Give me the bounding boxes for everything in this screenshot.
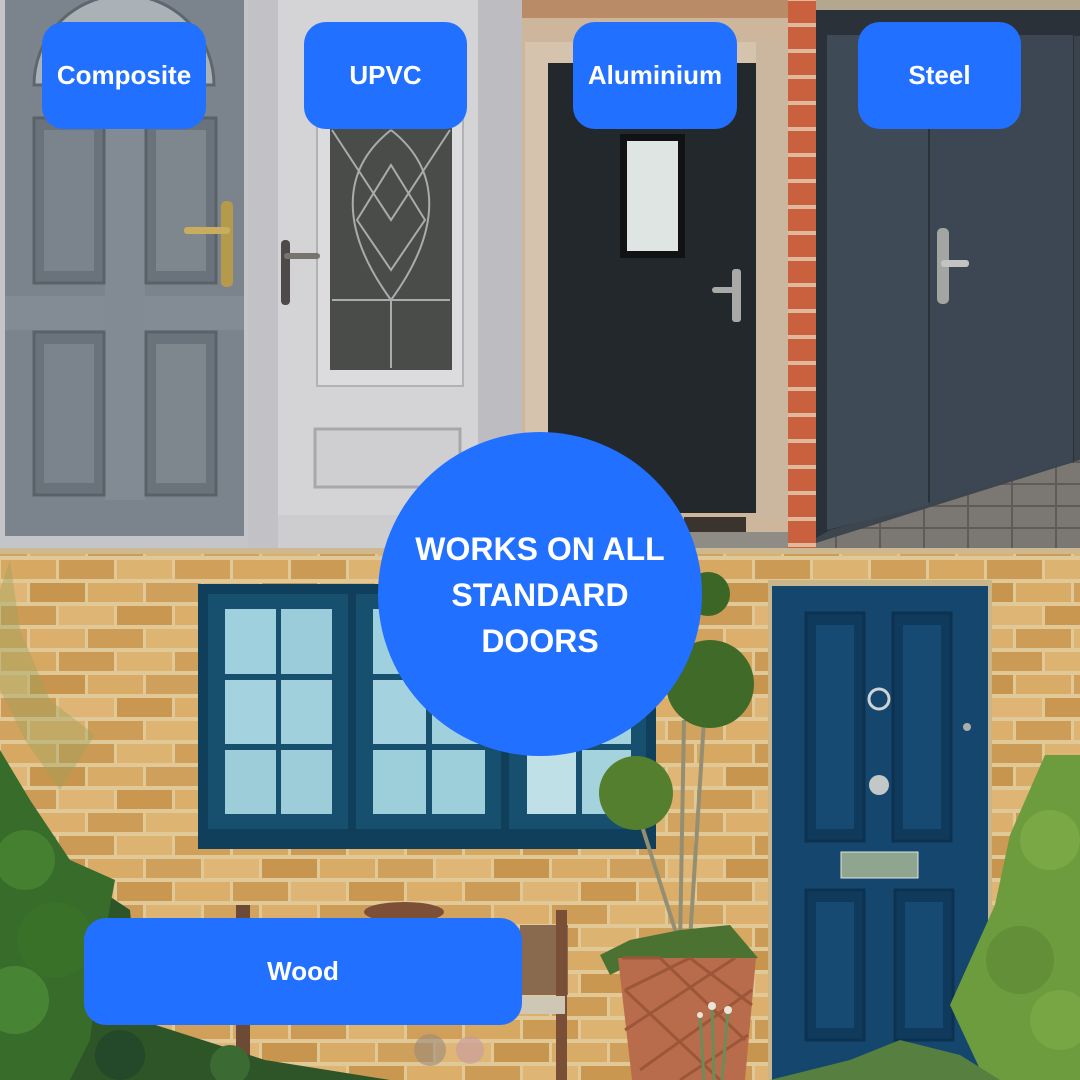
icon: keypad lock: [937, 228, 969, 304]
callout: works on all standard doors: DOORS: [481, 623, 599, 659]
icon: gold door handle: [184, 201, 233, 287]
panel: composite door: [0, 0, 248, 548]
callout: works on all standard doors: STANDARD: [451, 577, 629, 613]
panel: steel door: [788, 0, 1080, 548]
label: UPVC: [304, 22, 467, 129]
callout: works on all standard doors: [378, 432, 702, 756]
label: Aluminium: [573, 22, 737, 129]
icon: silver door handle: [281, 240, 320, 305]
panel: uPVC door: [248, 0, 522, 548]
label: Steel: [858, 22, 1021, 129]
callout: works on all standard doors: WORKS ON ALL: [415, 531, 665, 567]
label: Steel: Steel: [908, 60, 971, 90]
garden bench: [236, 902, 568, 1080]
label: Composite: [42, 22, 206, 129]
shrubs: [0, 560, 1080, 1080]
label: UPVC: UPVC: [349, 60, 422, 90]
front door: [768, 580, 992, 1080]
label: Aluminium: Aluminium: [588, 60, 722, 90]
label: Wood: [84, 918, 522, 1025]
label: Composite: Composite: [57, 60, 191, 90]
panel: aluminium door: [522, 0, 788, 548]
window: [198, 584, 656, 849]
label: Wood: Wood: [267, 956, 339, 986]
panel: wood door and brick house: [0, 548, 1080, 1080]
topiary plant and pot: [599, 572, 758, 1080]
